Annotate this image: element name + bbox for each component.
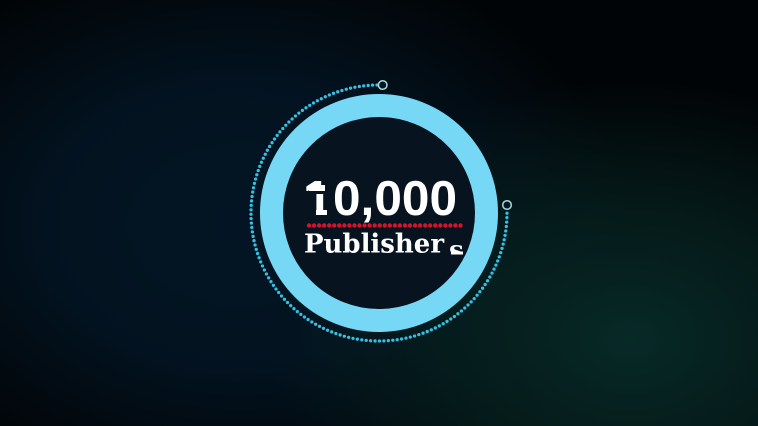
number: 10,000: 0,000 xyxy=(333,172,457,226)
number: 10,000 xyxy=(306,180,455,222)
light blue ring xyxy=(272,106,486,320)
arc end marker: right xyxy=(503,201,511,209)
red dotted divider xyxy=(309,223,461,228)
number: 10,000: 1 xyxy=(305,172,332,226)
label: Publishers xyxy=(305,232,463,254)
arc end marker: top xyxy=(378,81,387,89)
label: Publishers: Publisher xyxy=(304,230,444,260)
number: 10,000: 1 xyxy=(303,172,330,226)
label: Publishers: s xyxy=(449,236,464,266)
dotted progress arc xyxy=(251,81,511,341)
